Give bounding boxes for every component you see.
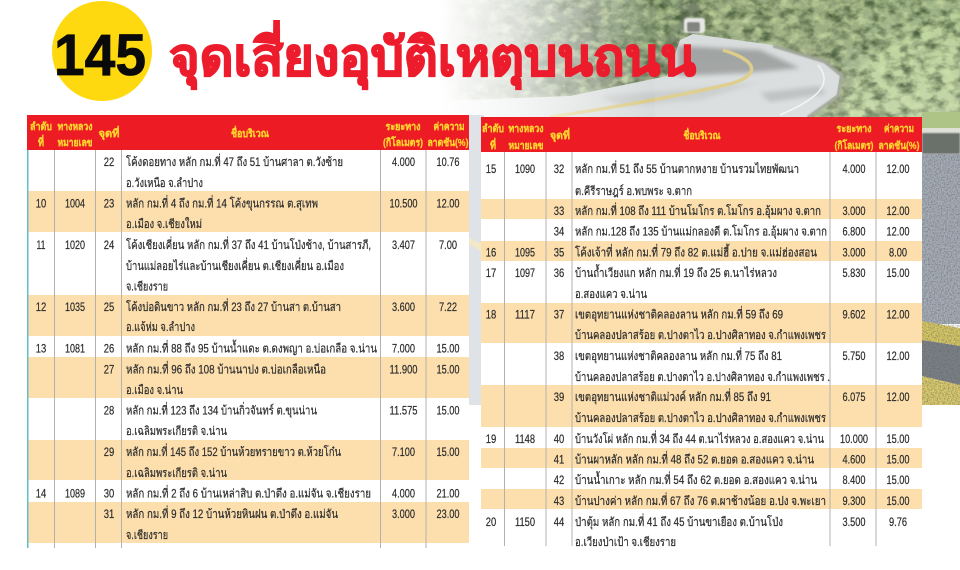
right table numbers: 12.00 bbox=[886, 390, 910, 404]
right table numbers: 43 bbox=[554, 494, 564, 508]
left table numbers: 1035 bbox=[65, 300, 85, 314]
right table numbers: 41 bbox=[554, 452, 564, 466]
road curb bbox=[773, 46, 842, 117]
left table numbers: 15.00 bbox=[436, 362, 460, 376]
right table header: ค่าความ bbox=[884, 123, 914, 135]
road yellow centre line bbox=[550, 50, 752, 117]
right table location names: บ้านวังโผ่ หลัก กม.ที่ 34 ถึง 44 ต.นาไร่หลวง อ.สองแคว จ.น่าน bbox=[575, 430, 824, 446]
right table header: จุดที่ bbox=[550, 127, 570, 143]
left table location names: หลัก กม.ที่ 145 ถึง 152 บ้านห้วยทรายขาว ต.ห้วยโก๋น bbox=[126, 443, 341, 459]
yellow circle with number 145 bbox=[52, 1, 152, 101]
left table location names: โค้งดอยทาง หลัก กม.ที่ 47 ถึง 51 บ้านศาลา ต.วังซ้าย bbox=[126, 153, 343, 169]
left table location names: หลัก กม.ที่ 2 ถึง 6 บ้านเหล่าสิบ ต.ป่าตึง อ.แม่จัน จ.เชียงราย bbox=[126, 484, 371, 500]
right table numbers: 12.00 bbox=[886, 224, 910, 238]
left table location names: จ.เชียงราย bbox=[126, 280, 168, 294]
left table header: ลำดับ bbox=[30, 121, 52, 133]
road white edge line bbox=[780, 65, 824, 115]
panel: right table bbox=[481, 117, 922, 549]
left table location names: หลัก กม.ที่ 88 ถึง 95 บ้านน้ำแดะ ต.ดงพญา อ.บ่อเกลือ จ.น่าน bbox=[126, 340, 377, 356]
right table numbers: 1090 bbox=[515, 162, 535, 176]
left table numbers: 1089 bbox=[65, 486, 85, 500]
left table location names: โค้งบ่อดินขาว หลัก กม.ที่ 23 ถึง 27 บ้านสา ต.บ้านสา bbox=[126, 298, 341, 314]
right table numbers: 5.830 bbox=[842, 266, 866, 280]
right table row backgrounds bbox=[481, 152, 922, 548]
left table row backgrounds bbox=[27, 150, 469, 548]
left table location names: จ.เชียงราย bbox=[126, 528, 168, 542]
photo strip between tables bbox=[466, 115, 484, 405]
right table location names: บ้านถ้ำเวียงแก หลัก กม.ที่ 19 ถึง 25 ต.นาไร่หลวง bbox=[575, 264, 777, 280]
title: จุดเสี่ยงอุบัติเหตุบนถนน bbox=[169, 21, 696, 90]
left table location names: อ.แจ้ห่ม จ.ลำปาง bbox=[126, 320, 195, 334]
left table numbers: 7.000 bbox=[392, 342, 415, 356]
left table location names: หลัก กม.ที่ 123 ถึง 134 บ้านกิ่วจันทร์ ต.ขุนน่าน bbox=[126, 402, 317, 418]
left table numbers: 31 bbox=[104, 507, 114, 521]
left table header: ที่ bbox=[38, 134, 44, 149]
right table numbers: 1095 bbox=[515, 246, 535, 260]
left table numbers: 10.76 bbox=[436, 155, 460, 169]
right table numbers: 17 bbox=[486, 266, 496, 280]
right table numbers: 3.500 bbox=[842, 515, 866, 529]
right table numbers: 15.00 bbox=[886, 494, 910, 508]
right table header: หมายเลข bbox=[508, 140, 544, 152]
right table location names: บ้านคลองปลาสร้อย ต.ปางตาไว อ.ปางศิลาทอง จ.กำแพงเพชร bbox=[575, 328, 826, 342]
left table numbers: 10.500 bbox=[390, 196, 418, 210]
left table numbers: 7.22 bbox=[439, 300, 457, 314]
right table numbers: 36 bbox=[554, 266, 564, 280]
left table numbers: 11.900 bbox=[390, 362, 418, 376]
right table numbers: 4.000 bbox=[842, 162, 866, 176]
left table location names: โค้งเชียงเคี่ยน หลัก กม.ที่ 37 ถึง 41 บ้านโป่งช้าง, บ้านสารภี, bbox=[126, 236, 371, 252]
right table numbers: 12.00 bbox=[886, 349, 910, 363]
left table header: ลาดชัน(%) bbox=[428, 137, 468, 149]
right table numbers: 44 bbox=[554, 515, 564, 529]
right table numbers: 35 bbox=[554, 246, 564, 260]
left table numbers: 12.00 bbox=[436, 196, 460, 210]
left table header: ค่าความ bbox=[434, 121, 465, 133]
left table header: จุดที่ bbox=[98, 125, 120, 141]
left table location names: หลัก กม.ที่ 9 ถึง 12 บ้านห้วยหินฝน ต.ป่าตึง อ.แม่จัน bbox=[126, 505, 338, 521]
left table header: หมายเลข bbox=[58, 137, 92, 149]
right table numbers: 1150 bbox=[515, 515, 535, 529]
right table location names: เขตอุทยานแห่งชาติคลองลาน หลัก กม.ที่ 75 ถึง 81 bbox=[575, 347, 782, 364]
right table header: ทางหลวง bbox=[508, 123, 544, 135]
right table header: ที่ bbox=[490, 137, 496, 152]
right table numbers: 37 bbox=[554, 308, 564, 322]
left table numbers: 23.00 bbox=[436, 507, 460, 521]
right table numbers: 33 bbox=[554, 204, 564, 218]
left table numbers: 1081 bbox=[65, 342, 85, 356]
right table numbers: 9.602 bbox=[842, 308, 866, 322]
left table numbers: 3.600 bbox=[392, 300, 415, 314]
right table numbers: 1148 bbox=[515, 432, 535, 446]
left table numbers: 30 bbox=[104, 486, 114, 500]
right table numbers: 32 bbox=[554, 162, 564, 176]
car on road bbox=[684, 18, 705, 33]
left table numbers: 15.00 bbox=[436, 342, 460, 356]
right table numbers: 20 bbox=[486, 515, 496, 529]
left table header: ชื่อบริเวณ bbox=[231, 125, 269, 140]
left table numbers: 10 bbox=[36, 196, 46, 210]
left table numbers: 12 bbox=[36, 300, 46, 314]
right table header: ชื่อบริเวณ bbox=[684, 127, 721, 142]
left table numbers: 1004 bbox=[65, 196, 85, 210]
right table numbers: 12.00 bbox=[886, 204, 910, 218]
right table numbers: 6.800 bbox=[842, 224, 866, 238]
right table numbers: 34 bbox=[554, 224, 564, 238]
left table numbers: 15.00 bbox=[436, 404, 460, 418]
left table numbers: 22 bbox=[104, 155, 114, 169]
right table location names: บ้านน้ำเกาะ หลัก กม.ที่ 54 ถึง 62 ต.ยอด อ.สองแคว จ.น่าน bbox=[575, 471, 817, 487]
right table numbers: 8.00 bbox=[889, 246, 907, 260]
left table numbers: 3.000 bbox=[392, 507, 415, 521]
right table numbers: 1097 bbox=[515, 266, 535, 280]
right table numbers: 1117 bbox=[515, 308, 535, 322]
right table numbers bbox=[486, 162, 910, 529]
left table numbers: 14 bbox=[36, 486, 46, 500]
right table header: (กิโลเมตร) bbox=[834, 139, 874, 152]
right table location names: เขตอุทยานแห่งชาติคลองลาน หลัก กม.ที่ 59 ถึง 69 bbox=[575, 306, 783, 322]
left table location names: อ.วังเหนือ จ.ลำปาง bbox=[126, 176, 203, 190]
right table location names: เขตอุทยานแห่งชาติแม่วงค์ หลัก กม.ที่ 85 ถึง 91 bbox=[575, 388, 771, 405]
right table numbers: 15.00 bbox=[886, 452, 910, 466]
left table numbers: 28 bbox=[104, 404, 114, 418]
right table numbers: 40 bbox=[554, 432, 564, 446]
right table numbers: 8.400 bbox=[842, 473, 866, 487]
background photo: curving road bbox=[440, 0, 960, 405]
right table numbers: 12.00 bbox=[886, 162, 910, 176]
left table location names: หลัก กม.ที่ 4 ถึง กม.ที่ 14 โค้งขุนกรรณ ต.สุเทพ bbox=[126, 194, 318, 212]
right table location names bbox=[575, 160, 830, 549]
left table numbers: 15.00 bbox=[436, 445, 460, 459]
right table numbers: 15.00 bbox=[886, 266, 910, 280]
left table header: (กิโลเมตร) bbox=[383, 136, 423, 149]
left table numbers: 23 bbox=[104, 196, 114, 210]
right table location names: หลัก กม.128 ถึง 135 บ้านแม่กลองดี ต.โมโกร อ.อุ้มผาง จ.ตาก bbox=[575, 224, 827, 240]
right table numbers: 3.000 bbox=[842, 204, 866, 218]
right table numbers: 10.000 bbox=[840, 432, 868, 446]
left table numbers: 21.00 bbox=[436, 486, 460, 500]
left table numbers bbox=[36, 155, 460, 521]
left table numbers: 24 bbox=[104, 238, 114, 252]
right table numbers: 42 bbox=[554, 473, 564, 487]
yellow circle with number 145: 145 bbox=[54, 23, 146, 88]
right table header bbox=[481, 117, 922, 152]
left table location names: อ.เฉลิมพระเกียรติ จ.น่าน bbox=[126, 466, 227, 480]
right table header: ลาดชัน(%) bbox=[878, 140, 920, 152]
right table location names: บ้านผาหลัก หลัก กม.ที่ 48 ถึง 52 ต.ยอด อ.สองแคว จ.น่าน bbox=[575, 450, 814, 466]
left table numbers: 29 bbox=[104, 445, 114, 459]
left table location names: อ.เมือง จ.น่าน bbox=[126, 383, 183, 397]
right table header: ลำดับ bbox=[482, 123, 504, 135]
left table numbers: 4.000 bbox=[392, 486, 415, 500]
left table numbers: 7.00 bbox=[439, 238, 457, 252]
left table numbers: 11.575 bbox=[390, 404, 418, 418]
right table location names: หลัก กม.ที่ 51 ถึง 55 บ้านตากหงาย บ้านรวมไทยพัฒนา bbox=[575, 160, 799, 176]
left table numbers: 3.407 bbox=[392, 238, 415, 252]
right table location names: ต.คีรีราษฎร์ อ.พบพระ จ.ตาก bbox=[575, 184, 692, 198]
left table header: ทางหลวง bbox=[58, 121, 92, 133]
left table numbers: 26 bbox=[104, 342, 114, 356]
panel: left table bbox=[27, 115, 469, 548]
right table numbers: 19 bbox=[486, 432, 496, 446]
left table header bbox=[27, 115, 469, 150]
right table numbers: 16 bbox=[486, 246, 496, 260]
right table header: ระยะทาง bbox=[836, 123, 872, 135]
right table location names: โค้งเจ้าที่ หลัก กม.ที่ 79 ถึง 82 ต.แม่ฮี้ อ.ปาย จ.แม่ฮ่องสอน bbox=[575, 244, 817, 260]
left table numbers: 1020 bbox=[65, 238, 85, 252]
left table numbers: 13 bbox=[36, 342, 46, 356]
right table numbers: 18 bbox=[486, 308, 496, 322]
left table location names: หลัก กม.ที่ 96 ถึง 108 บ้านนาปง ต.บ่อเกลือเหนือ bbox=[126, 360, 326, 376]
left table location names: อ.เฉลิมพระเกียรติ จ.น่าน bbox=[126, 424, 227, 438]
right table numbers: 39 bbox=[554, 390, 564, 404]
right table location names: ป่าตุ้ม หลัก กม.ที่ 41 ถึง 45 บ้านขาเยือง ต.บ้านโป่ง bbox=[575, 513, 783, 530]
right table location names: บ้านคลองปลาสร้อย ต.ปางตาไว อ.ปางศิลาทอง จ.กำแพงเพชร bbox=[575, 411, 826, 425]
left table header: ระยะทาง bbox=[386, 121, 420, 133]
right table numbers: 38 bbox=[554, 349, 564, 363]
right table numbers: 3.000 bbox=[842, 246, 866, 260]
left table numbers: 27 bbox=[104, 362, 114, 376]
left table numbers: 4.000 bbox=[392, 155, 415, 169]
right table location names: อ.สองแคว จ.น่าน bbox=[575, 287, 647, 301]
right table numbers: 12.00 bbox=[886, 308, 910, 322]
left table numbers: 7.100 bbox=[392, 445, 415, 459]
right table location names: หลัก กม.ที่ 108 ถึง 111 บ้านโมโกร ต.โมโกร อ.อุ้มผาง จ.ตาก bbox=[575, 202, 821, 219]
right table numbers: 9.300 bbox=[842, 494, 866, 508]
right table numbers: 5.750 bbox=[842, 349, 866, 363]
right table location names: บ้านปางค่า หลัก กม.ที่ 67 ถึง 76 ต.ผาช้างน้อย อ.ปง จ.พะเยา bbox=[575, 492, 826, 508]
right table numbers: 6.075 bbox=[842, 390, 866, 404]
photo strip right of tables bbox=[922, 112, 960, 405]
right table numbers: 4.600 bbox=[842, 452, 866, 466]
right table location names: บ้านคลองปลาสร้อย ต.ปางตาไว อ.ปางศิลาทอง จ.กำแพงเพชร . bbox=[575, 370, 830, 384]
left table location names bbox=[126, 153, 377, 542]
road surface bbox=[468, 34, 840, 117]
left table location names: บ้านแม่ลอยไร่และบ้านเชียงเคี่ยน ต.เชียงเคี่ยน อ.เมือง bbox=[126, 257, 344, 273]
left table numbers: 25 bbox=[104, 300, 114, 314]
right table numbers: 15 bbox=[486, 162, 496, 176]
right table numbers: 15.00 bbox=[886, 473, 910, 487]
left table numbers: 11 bbox=[36, 238, 46, 252]
right table numbers: 9.76 bbox=[889, 515, 907, 529]
right table location names: อ.เวียงป่าเป้า จ.เชียงราย bbox=[575, 535, 676, 549]
right table numbers: 15.00 bbox=[886, 432, 910, 446]
left table location names: อ.เมือง จ.เชียงใหม่ bbox=[126, 217, 202, 231]
